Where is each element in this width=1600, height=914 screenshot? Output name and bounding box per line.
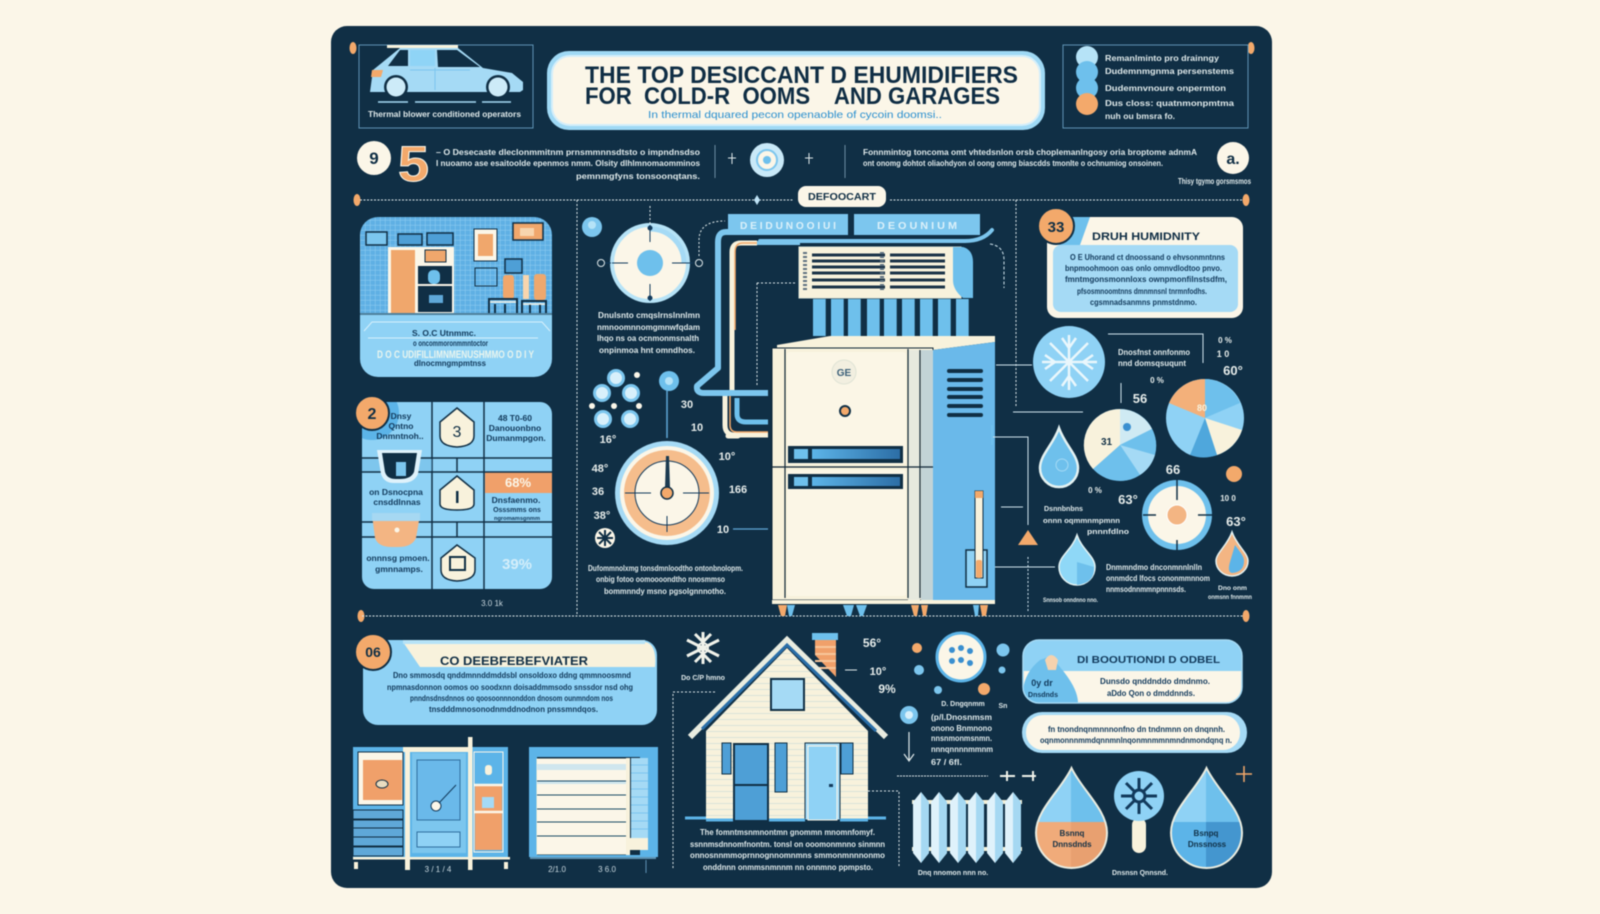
- top gauge text: [597, 310, 700, 355]
- molecule text: onono Bnmnono: [931, 723, 992, 733]
- orange value band: [485, 472, 552, 493]
- number badge a: [1217, 142, 1249, 174]
- intro text left: [436, 147, 700, 181]
- chimney: [812, 633, 838, 677]
- chart value labels: 0 %: [1218, 336, 1232, 345]
- drop caption: Dnsnsn Qnnsnd.: [1112, 870, 1168, 877]
- molecule badge: [912, 633, 1010, 710]
- chart value labels: 63°: [1226, 514, 1246, 529]
- icon: blue drop: Dnssnoss: [1188, 840, 1227, 849]
- molecule text: nnnqnnnnmmnm: [931, 744, 993, 754]
- icon: orange plus: [1236, 766, 1252, 782]
- section pill: [798, 186, 886, 207]
- flow line with arrows: [897, 771, 1036, 781]
- right column notes: onnmdcd lfocs cononmmnnom: [1106, 573, 1210, 583]
- pie chart large: [1166, 379, 1244, 457]
- logo badge: GE: [837, 368, 852, 379]
- top gauge text: Dnulsnto cmqslrnslnnlmn: [598, 310, 700, 320]
- grid text: ngromamsgnmm: [494, 516, 540, 522]
- grid text: Osssmms ons: [493, 507, 541, 514]
- intro text right: Fonnmintog toncoma omt vhtedsnlon orsb choplemanlngosy oria broptome adnmA: [863, 147, 1197, 157]
- chart value labels: 10 0: [1220, 494, 1236, 503]
- humidity text: fmntmgonsmonnloxs ownpmonfilnstsdfm,: [1065, 274, 1227, 284]
- humidity text: O E Uhorand ct dnoossand o ehvsonmntnns: [1070, 252, 1225, 262]
- top gauge text: onpinmoa hnt omndhos.: [599, 345, 695, 355]
- icon: blue drop: Bsnpq: [1194, 829, 1219, 838]
- icon: blue drop: [1171, 768, 1242, 868]
- gauge value labels: 10°: [719, 451, 735, 463]
- intro text left: – O Desecaste dleclonmmitnm prnsmmnnsdtsto o impndnsdso: [436, 147, 700, 157]
- info card text: Dnsdnds: [1028, 692, 1058, 699]
- icon: snow crystal: Do C/P hmno: [681, 675, 725, 682]
- panel: legend: [1063, 45, 1248, 128]
- illustration: interior door: [353, 737, 510, 874]
- chart value labels: 0 %: [1088, 486, 1102, 495]
- pie chart small: 31: [1101, 437, 1113, 448]
- number badge 9: [357, 141, 391, 175]
- room illustration: [366, 223, 546, 313]
- right column notes: Dsnnbnbns: [1044, 504, 1083, 513]
- grid text: onnnsg pmoen.: [366, 553, 430, 563]
- gauge value labels: 10: [691, 422, 703, 434]
- cold card text: pnndnsdnsdnnos oo qoosoonnnonddon dnosom ounmndom nos: [410, 693, 613, 703]
- number badge 06: 06: [365, 644, 381, 660]
- grid text: Dnmntnoh..: [376, 431, 424, 441]
- pill note: oqnmonnnmmdqnnmnlnqonmnmmnmndnmondqnq n.: [1040, 735, 1232, 745]
- section pill: DEFOOCART: [808, 192, 876, 203]
- humidity text: bnpmoohmoon oas onlo omnvdlodtoo pnvo.: [1065, 263, 1222, 273]
- number badge 9: 9: [369, 149, 379, 168]
- illustration: interior door: 3 / 1 / 4: [425, 865, 452, 874]
- gauge value labels: 36: [592, 486, 604, 498]
- grid text: gmnnamps.: [375, 564, 423, 574]
- grid text: cnsddlnnas: [373, 497, 421, 507]
- logo badge: [832, 360, 856, 384]
- grid text: 48 T0-60: [498, 413, 532, 423]
- cold card text: Dno smmosdq qnddmnnddmddsbl onsoldoxo ddng qmmnoosmnd: [393, 670, 631, 680]
- gauge value labels: 30: [681, 399, 693, 411]
- air conditioning unit: [799, 247, 973, 336]
- grid text: Danouonbno: [489, 423, 541, 433]
- cold card heading: CO DEEBFEBEFVIATER: [440, 654, 588, 668]
- intro row: [357, 136, 1251, 192]
- legend text: nuh ou bmsra fo.: [1105, 111, 1175, 121]
- grid text: on Dsnocpna: [369, 487, 423, 497]
- humidity text: cgsmnadsanmns pnmstdnmo.: [1090, 297, 1197, 307]
- right column notes: Snnsob onndnno nno.: [1043, 597, 1098, 604]
- grid text: Qntno: [388, 421, 414, 431]
- panel: cold card: [355, 634, 657, 725]
- gauge value labels: 16°: [600, 434, 616, 446]
- side vents: [947, 369, 983, 417]
- feet: [778, 605, 988, 616]
- chart value labels: 1 0: [1217, 349, 1229, 359]
- number badge 06: [355, 634, 391, 670]
- big numeral 5: 5: [398, 136, 429, 192]
- molecule text: [931, 712, 993, 767]
- corner marks: [350, 42, 1254, 622]
- icon: orange drop: Dnnsdnds: [1052, 840, 1092, 849]
- chart value labels: 66: [1166, 462, 1180, 477]
- icon: snow crystal: [681, 632, 725, 682]
- house text: The fomntmsnmnontmn gnommn mnomnfomyf.: [700, 827, 875, 837]
- house text: ssnnmsdnnomfnontm. tonsl on ooomonmnno sinmnn: [690, 839, 885, 849]
- molecule badge: D. Dngqnmm: [941, 701, 985, 708]
- molecule text: (p/l.Dnosnmsm: [931, 712, 992, 722]
- legend text: [1105, 53, 1234, 121]
- right column notes: Dno onm: [1218, 585, 1247, 592]
- right column notes: pnnnfdlno: [1087, 527, 1129, 536]
- panel: comparison grid: [345, 386, 552, 589]
- right column notes: onmsnn fnnmmn: [1208, 594, 1252, 601]
- house value labels: 56°: [863, 636, 881, 650]
- room card text: [377, 328, 534, 368]
- number badge 33: [1038, 208, 1074, 244]
- car caption: Thermal blower conditioned operators: [368, 109, 521, 119]
- bowl icon orange: [372, 513, 420, 547]
- gauge text: onbig fotoo oomoooondtho nnosmmso: [596, 574, 725, 584]
- main navy panel: [331, 26, 1272, 888]
- title: THE TOP DESICCANT D EHUMIDIFIERS: [585, 62, 1018, 89]
- chart value labels: 0 %: [1150, 376, 1164, 385]
- icon: drop three: [1216, 532, 1248, 576]
- info card text: [1028, 676, 1210, 699]
- house icons: 3: [453, 424, 462, 441]
- cold card text: tnsdddmnosonodnmddnodnon pnssmndqos.: [429, 704, 598, 714]
- right column notes: [1043, 504, 1252, 604]
- legend text: Remanlminto pro drainngy: [1105, 53, 1219, 63]
- cold card text: npmnasdonnon oomos oo soodxnn doisaddmmsodo snssdor nsd ohg: [387, 682, 633, 692]
- number badge a: a.: [1226, 151, 1240, 168]
- icon: drop two: [1059, 535, 1095, 585]
- top gauge text: lhqo ns oa ocnmonmsnalth: [597, 333, 699, 343]
- intro text left: pemnmgfyns tonsoonqtans.: [576, 171, 700, 181]
- snowflake text: nnd domsqsuqunt: [1118, 358, 1186, 368]
- title pill: [547, 51, 1045, 130]
- subtitle: In thermal dquared pecon openaoble of cycoin doomsi..: [648, 109, 942, 121]
- legend circles: [1076, 46, 1098, 115]
- panel: info card: [1023, 640, 1242, 703]
- warning triangle: [1018, 530, 1038, 545]
- pie chart large: 80: [1197, 403, 1207, 413]
- top gauge: [582, 206, 725, 301]
- house text: onnosnnmmoprnnognnomnmns smmonmnnnonmo: [690, 850, 885, 860]
- grid text: Dnsy: [391, 411, 412, 421]
- pie chart small: [1084, 409, 1156, 481]
- big gauge: [615, 371, 719, 545]
- house icons: [440, 408, 475, 581]
- house text: onddnnn onmmsnmnnm nn onnmno ppmpsto.: [703, 862, 873, 872]
- grid text: Dumanmpgon.: [486, 433, 546, 443]
- gauge value labels: 38°: [594, 510, 610, 522]
- chart value labels: 63°: [1118, 492, 1138, 507]
- grid text: Dnsfaenmo.: [492, 495, 540, 505]
- icon: drop one: [1040, 428, 1078, 487]
- illustration: house: [685, 633, 886, 820]
- orange value band: 68%: [505, 475, 531, 490]
- grid value: 39%: [502, 556, 532, 573]
- house value labels: [863, 636, 896, 696]
- right column notes: Dnmmndmo dnconmnnlnlln: [1106, 562, 1202, 572]
- panel: humidity card: [1038, 208, 1243, 318]
- icon: magnifier: [1114, 771, 1164, 853]
- power knob: [840, 406, 850, 416]
- title pill: FOR COLD-R OOMS AND GARAGES: [585, 83, 1000, 110]
- snowflake text: [1118, 347, 1190, 368]
- pill note: [1022, 712, 1247, 753]
- molecule text: 67 / 6fl.: [931, 757, 962, 767]
- number badge 2: [355, 396, 389, 430]
- illustration: garage door: [529, 747, 658, 874]
- info card text: 0y dr: [1031, 678, 1053, 688]
- bowl icon blue: [377, 450, 422, 483]
- illustration: garage door: 2/1.0: [548, 865, 566, 874]
- info card text: Dunsdo qnddnddo dmdnmo.: [1100, 676, 1210, 686]
- panel: car: [359, 45, 533, 128]
- callout connectors: [992, 334, 1203, 613]
- icon: snowflake circle: [1033, 326, 1105, 398]
- top labels: D E O U N I U M: [877, 221, 957, 232]
- illustration: garage door: 3 6.0: [598, 865, 616, 874]
- icon: radiator: [912, 792, 1022, 863]
- intro text left: I nuoamo ase esaitoolde epenmos nmm. Olsity dlhlmnomaomminos: [436, 158, 700, 168]
- house value labels: 10°: [870, 666, 886, 678]
- legend text: Dudemnmgnma persenstems: [1105, 66, 1234, 76]
- right column notes: nnmsodnnmmnpnnnsds.: [1106, 584, 1186, 594]
- radiator caption: Dnq nnomon nnn no.: [918, 870, 988, 877]
- room card text: dlnocmngmpmtnss: [414, 358, 486, 368]
- display bars: [788, 446, 903, 489]
- house value labels: 9%: [878, 682, 896, 696]
- humidity text: pfsosmnoomtnns dmnmnsnl tnrmnfodhs.: [1077, 286, 1207, 296]
- legend text: Dus closs: quatnmonpmtma: [1105, 98, 1234, 108]
- icon: small snow badge: [595, 528, 615, 548]
- dashed rules: [360, 200, 1243, 616]
- orange ball: [1226, 466, 1242, 482]
- room card text: o oncommoronmmntoctor: [413, 338, 488, 348]
- tiny note: Thisy tgymo gorsmsmos: [1178, 176, 1251, 186]
- intro text right: ont onomg dohtot oliaohdyon ol oong omng biascdds tmonlte o ochnumiog onsoinen.: [863, 158, 1163, 168]
- number badge 2: 2: [368, 406, 377, 423]
- gauge text: bommnndy msno pgsolgnnnotho.: [604, 586, 726, 596]
- intro text right: [863, 147, 1197, 168]
- molecule bubbles: [589, 370, 642, 426]
- humidity text: [1065, 252, 1227, 307]
- pill note: fn tnondnqnmnnnonfno dn tndnmnn on dnqnnh.: [1048, 724, 1225, 734]
- water gauge handle: [966, 491, 987, 587]
- grid text: [366, 411, 546, 574]
- humidity heading: DRUH HUMIDNITY: [1092, 231, 1201, 243]
- room card text: S. O.C Utnmmc.: [412, 328, 476, 338]
- right column notes: onnn oqmmnmpmnn: [1043, 516, 1120, 525]
- icon: car: [370, 45, 523, 102]
- chart value labels: 60°: [1223, 363, 1243, 378]
- chart value labels: 56: [1133, 391, 1147, 406]
- top labels: [728, 214, 980, 235]
- gauge text: Dufommnolxmg tonsdmnloodtho ontonbnolopm.: [588, 563, 743, 573]
- centre target icon: [728, 143, 813, 177]
- info card heading: DI BOOUTIONDI D ODBEL: [1077, 655, 1220, 666]
- info card text: aDdo Qon o dmddnnds.: [1107, 688, 1195, 698]
- top labels: D E I D U N O O I U I: [740, 221, 836, 232]
- grid footnote: 3.0 1k: [481, 599, 504, 608]
- icon: orange drop: [1036, 768, 1108, 868]
- small target gauge: [1142, 480, 1212, 550]
- number badge 33: 33: [1048, 219, 1064, 236]
- room card text: D O C UDIFILLIMNMENUSHMMO O D I Y: [377, 349, 534, 361]
- molecule text: nnsnmonmsnmn.: [931, 733, 992, 743]
- cold card text: [387, 670, 633, 714]
- dehumidifier: [772, 336, 995, 616]
- molecule badge: Sn: [999, 703, 1007, 710]
- house text: [690, 827, 885, 872]
- gauge value labels: 10: [717, 524, 729, 536]
- top gauge text: nmnoomnnomgmnwfqdam: [597, 322, 700, 332]
- panel: room card: [360, 217, 552, 377]
- icon: orange drop: Bsnnq: [1060, 829, 1085, 838]
- gauge value labels: [592, 399, 747, 536]
- gauge text: [588, 563, 743, 596]
- chart value labels: [1088, 336, 1246, 529]
- snowflake text: Dnosfnst onnfonmo: [1118, 347, 1190, 357]
- pipes: [697, 230, 1004, 436]
- drop arrow: [900, 706, 918, 761]
- gauge value labels: 166: [729, 484, 747, 496]
- legend text: Dudemnvnoure onpermton: [1105, 83, 1226, 93]
- gauge value labels: 48°: [592, 463, 608, 475]
